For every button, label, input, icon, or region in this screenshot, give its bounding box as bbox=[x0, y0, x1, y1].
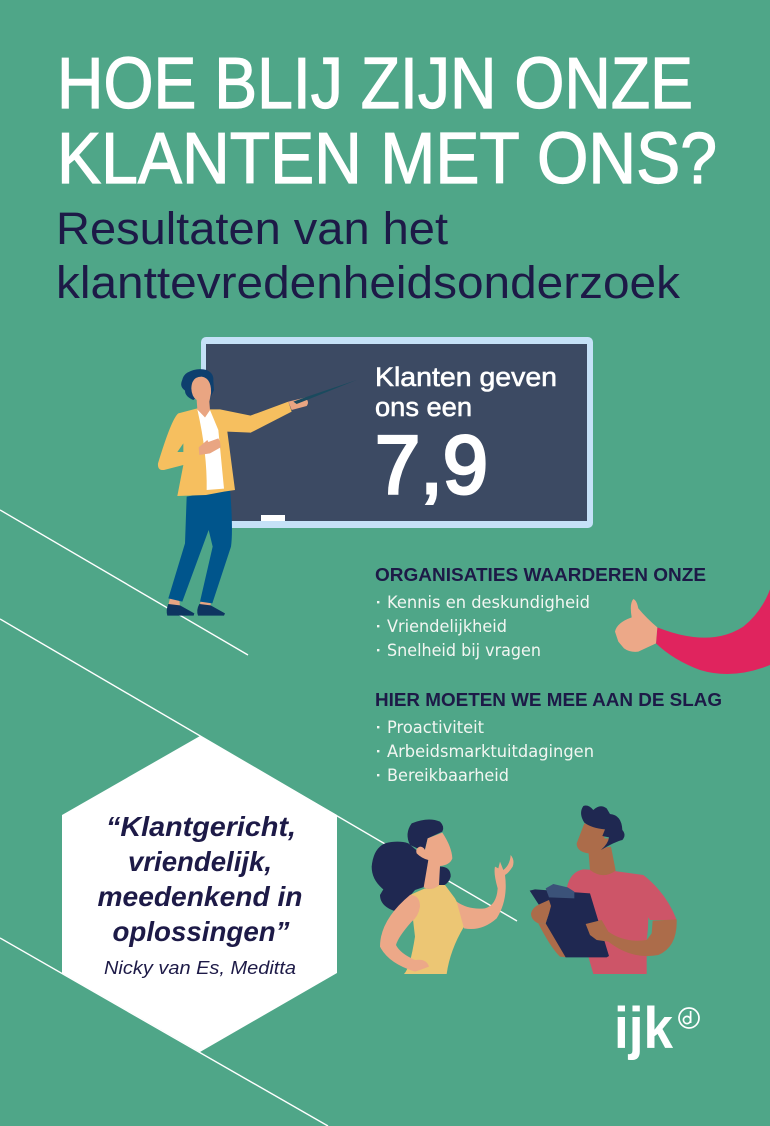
illustration: teacher pointing at board bbox=[158, 369, 357, 616]
section: organisaties waarderen onze: Vriendelijkheid bbox=[387, 617, 507, 637]
quote text: meedenkend in bbox=[98, 881, 302, 912]
illustration: thumbs-up arm bbox=[615, 589, 770, 674]
section: organisaties waarderen onze: Snelheid bij vragen bbox=[387, 641, 541, 661]
quote text: oplossingen” bbox=[112, 916, 290, 947]
section: hier moeten we mee aan de slag: Proactiviteit bbox=[387, 718, 484, 738]
section: hier moeten we mee aan de slag bbox=[375, 689, 722, 786]
logo: ijk: ijk bbox=[614, 996, 674, 1061]
quote attribution: Nicky van Es, Meditta bbox=[104, 958, 296, 978]
quote text: vriendelijk, bbox=[128, 846, 272, 877]
chalkboard bbox=[201, 337, 593, 528]
subtitle: Resultaten van het bbox=[56, 203, 449, 254]
quote text: “Klantgericht, bbox=[106, 811, 296, 842]
section: organisaties waarderen onze: Kennis en deskundigheid bbox=[387, 593, 590, 613]
title bbox=[57, 44, 717, 199]
quote hexagon bbox=[62, 736, 337, 1052]
quote text bbox=[98, 811, 302, 947]
title: HOE BLIJ ZIJN ONZE bbox=[57, 44, 693, 124]
subtitle bbox=[56, 203, 681, 308]
score text: 7,9 bbox=[375, 418, 488, 511]
score text: Klanten geven bbox=[375, 362, 557, 392]
section: organisaties waarderen onze bbox=[375, 564, 706, 661]
subtitle: klanttevredenheidsonderzoek bbox=[56, 257, 681, 308]
score text bbox=[375, 362, 557, 511]
title: KLANTEN MET ONS? bbox=[57, 119, 717, 199]
illustration: woman talking bbox=[372, 820, 513, 974]
score text: ons een bbox=[375, 392, 472, 422]
section: hier moeten we mee aan de slag: Bereikbaarheid bbox=[387, 766, 509, 786]
logo mark bbox=[679, 1008, 699, 1028]
section: hier moeten we mee aan de slag: HIER MOETEN WE MEE AAN DE SLAG bbox=[375, 689, 722, 710]
illustration: man with clipboard bbox=[530, 805, 677, 974]
section: organisaties waarderen onze: ORGANISATIES WAARDEREN ONZE bbox=[375, 564, 706, 585]
section: hier moeten we mee aan de slag: Arbeidsmarktuitdagingen bbox=[387, 742, 594, 762]
